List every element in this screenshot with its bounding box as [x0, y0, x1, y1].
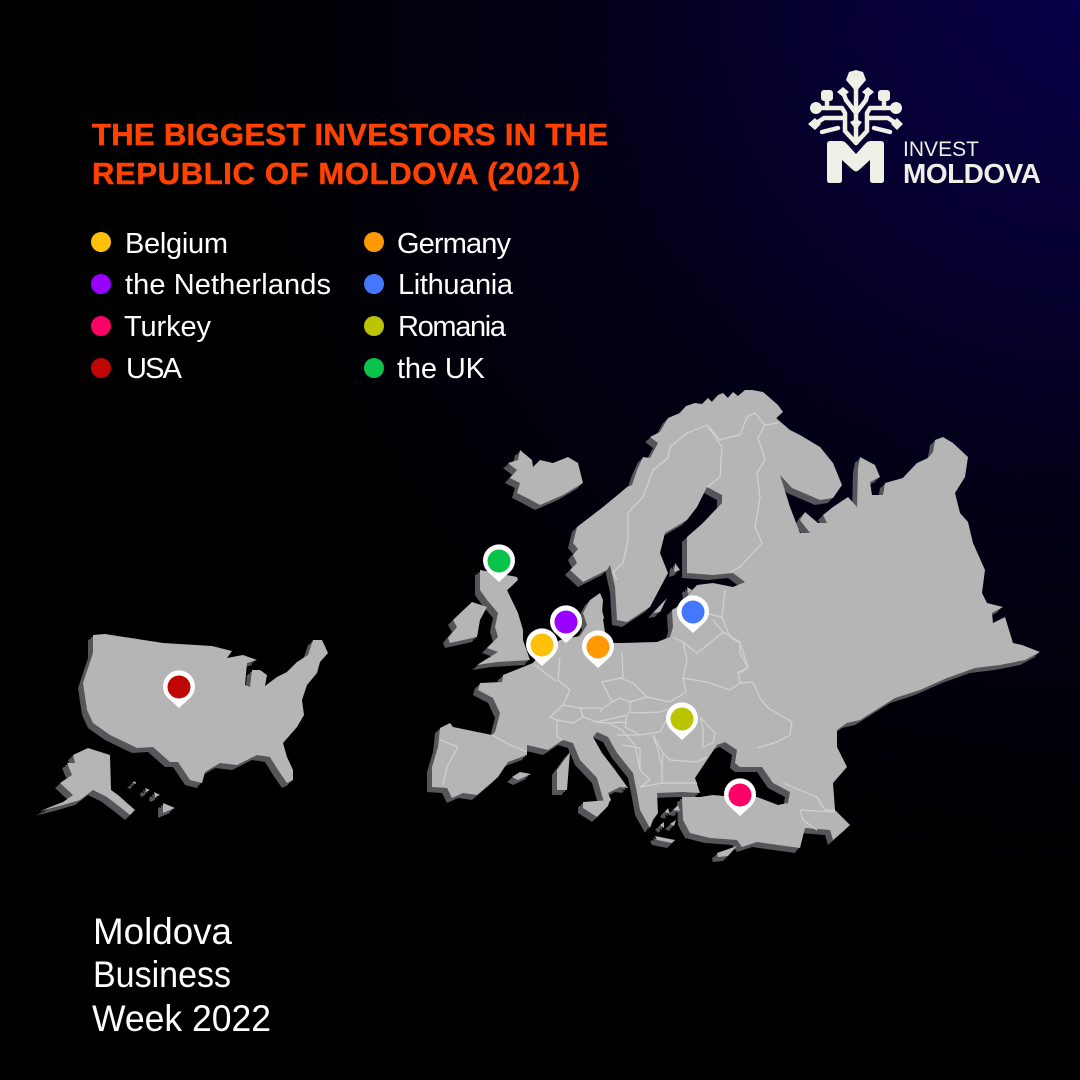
- footer text: [92, 911, 271, 1039]
- legend item: Turkey: Turkey: [124, 311, 212, 343]
- pin: Romania: [666, 702, 698, 740]
- pin: Belgium: [526, 628, 558, 666]
- pin: Germany: [582, 630, 614, 668]
- legend item: Lithuania: Lithuania: [398, 269, 514, 301]
- map: USA: [35, 634, 328, 820]
- legend item: Romania: Romania: [398, 311, 507, 343]
- footer text: Moldova: [93, 911, 232, 952]
- legend item: the Netherlands: the Netherlands: [125, 269, 331, 301]
- logo wordmark: MOLDOVA: [903, 158, 1041, 189]
- logo: Invest Moldova: [808, 70, 1041, 189]
- legend item: Germany: Germany: [397, 228, 512, 260]
- title: THE BIGGEST INVESTORS IN THE: [92, 117, 608, 152]
- pin: USA: [163, 670, 195, 708]
- footer text: Business: [93, 954, 231, 995]
- pin: the UK: [483, 544, 515, 582]
- legend: [91, 228, 514, 385]
- legend item: the UK: the UK: [397, 353, 486, 385]
- legend item: USA: USA: [126, 353, 183, 385]
- logo wordmark: INVEST: [903, 138, 979, 161]
- logo M mark: [827, 141, 884, 183]
- footer text: Week 2022: [92, 998, 271, 1039]
- pin: Turkey: [724, 778, 756, 816]
- logo wordmark: [903, 138, 1041, 189]
- legend item: Belgium: Belgium: [125, 228, 228, 260]
- legend item: USA: [91, 353, 183, 385]
- title: REPUBLIC OF MOLDOVA (2021): [92, 156, 580, 191]
- logo tree icon: [808, 70, 903, 143]
- pin: Lithuania: [677, 595, 709, 633]
- title: [92, 117, 608, 191]
- map: Europe: [427, 390, 1040, 862]
- pin: the Netherlands: [550, 605, 582, 643]
